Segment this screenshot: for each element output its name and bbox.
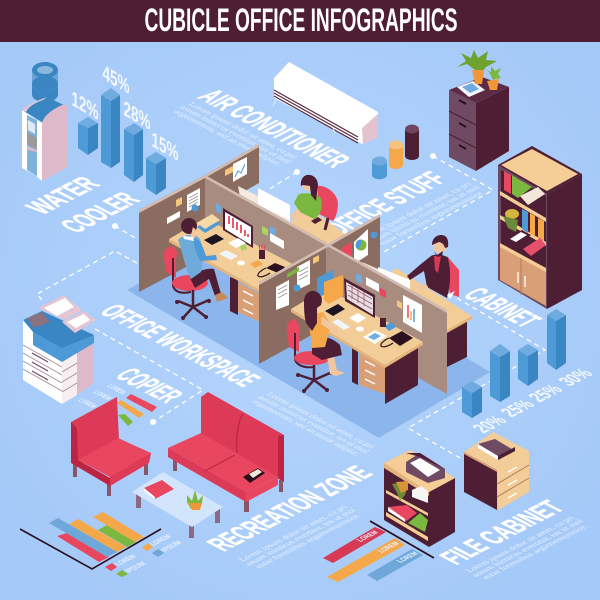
- chart: water cooler bars: [72, 61, 179, 195]
- cubicle: lower-right desk: [291, 270, 423, 404]
- person: woman in orange at lower-right desk: [287, 291, 345, 393]
- chart: water cooler bars: 28%: [124, 97, 151, 135]
- sticker: line chart on back partition: [225, 157, 247, 182]
- sticker notes on left partition: [167, 188, 200, 224]
- chart: copier mini bars: [76, 383, 157, 426]
- label: recreation zone: assum inimicus evertitur, ius ut mol: [242, 507, 359, 567]
- chart: water cooler bars: 45%: [103, 61, 130, 99]
- label: recreation zone: RECREATION ZONE: [200, 462, 380, 555]
- sticker: bar chart: [397, 295, 422, 333]
- woman in green: [294, 193, 322, 219]
- header band: [0, 0, 600, 42]
- monitor: lower-left: [223, 208, 253, 248]
- binders: [317, 270, 333, 296]
- cubicle: left side partition: [139, 175, 205, 292]
- icon: drawer cabinet with plants: [449, 50, 509, 171]
- label: file cabinet: assum inimicus evertitur, ius ut mol: [469, 518, 586, 578]
- chart: water cooler bars: 12%: [72, 87, 99, 125]
- label: office stuff: assum inimicus evertitur, ius ut mol: [366, 184, 483, 244]
- label: office stuff: [316, 168, 490, 248]
- chart: horizontal isometric bars: IPSUM: [159, 539, 185, 553]
- label: recreation zone: Lorem ipsum dolor sit amet, cu pri: [236, 503, 350, 563]
- chart: ribbon bars: LOREM: [355, 529, 381, 543]
- label: office workspace: OFFICE WORKSPACE: [92, 301, 267, 391]
- chart: copier mini bars: LOREM: [91, 389, 114, 401]
- label: copier: COPIER: [108, 365, 190, 407]
- icon: shelf with printer: [384, 450, 455, 547]
- icon: sofa: [168, 392, 284, 512]
- label: water cooler: COOLER: [54, 188, 147, 237]
- chart: ribbon bars: LOREM: [376, 540, 402, 554]
- chart: horizontal isometric bars: IPSUM: [123, 560, 149, 574]
- icon: copier: [23, 295, 96, 404]
- chart: ribbon bars: LOREM: [395, 550, 421, 564]
- plants: [457, 50, 501, 90]
- label: office workspace: Lorem ipsum dolor sit amet, cu pri: [264, 391, 379, 450]
- chair: lower-left: [164, 246, 211, 320]
- label: air conditioner: argumentum, sed an mutat adipisc.: [172, 108, 286, 167]
- chart: cabinet bars: 25%: [496, 397, 540, 420]
- chart: cabinet bars: 25%: [524, 382, 568, 405]
- label: office workspace: assum inimicus evertitur, ius ut mol: [256, 394, 373, 454]
- cubicle: long centre partition: [139, 144, 447, 394]
- cubicle: lower-left desk: [169, 208, 300, 322]
- chart: horizontal isometric bars: LOREM: [113, 553, 139, 567]
- icon: armchair: [71, 397, 151, 496]
- chart: horizontal isometric bars: LOREM: [148, 533, 174, 547]
- monitor: lower-right: [344, 278, 375, 318]
- telephone: [381, 331, 413, 347]
- label: water cooler: [19, 173, 147, 237]
- cubicle: right-hand far partition: [326, 214, 380, 327]
- label: file cabinet: Lorem ipsum dolor sit amet, cu pri: [463, 514, 577, 574]
- label: file cabinet: estae forensibus argumentumnior.: [479, 523, 590, 580]
- label: water cooler: WATER: [19, 173, 108, 218]
- cubicle: back partition: [205, 144, 259, 214]
- icon: bookcase: [498, 146, 582, 309]
- chart: copier mini bars: LOREM: [105, 383, 128, 395]
- cupboard doors: [500, 245, 546, 306]
- chair: upper-left: [317, 186, 338, 221]
- chart: horizontal isometric bars: [20, 512, 185, 577]
- label: air conditioner: Lorem ipsum dolor sit amet, cu pri: [186, 101, 301, 160]
- label: air conditioner: [170, 86, 357, 172]
- man in suit: [407, 255, 450, 298]
- notes on partition: [216, 203, 386, 298]
- icon: air conditioner: [273, 62, 378, 144]
- chair: man: [446, 256, 459, 297]
- label: office stuff: Lorem ipsum dolor sit amet, cu pri: [360, 180, 474, 240]
- sticker: pie chart: [338, 229, 378, 264]
- icon: water cooler: [22, 62, 68, 181]
- dashed connectors: [37, 153, 545, 458]
- cubicle: upper-left desk with woman: [238, 175, 346, 247]
- telephone: [258, 263, 285, 277]
- shelves: [500, 191, 546, 222]
- chart: water cooler bars: 15%: [152, 128, 179, 166]
- label: recreation zone: estae forensibus argumentumnior.: [252, 512, 363, 569]
- label: file cabinet: [433, 497, 593, 582]
- chart: cabinet bars: [462, 309, 598, 436]
- person: man in blue at lower-left desk: [164, 218, 228, 320]
- icon: file cabinet: [464, 432, 529, 510]
- label: air conditioner: assum inimicus evertitur, ius ut mol: [178, 104, 295, 164]
- workspace floor: [127, 225, 490, 438]
- chart: copier mini bars: LOREM: [76, 397, 99, 409]
- chart: cabinet bars: 20%: [468, 413, 512, 436]
- cubicle: upper-right desk with man: [362, 235, 472, 367]
- chart: ribbon bars: [323, 521, 434, 582]
- plant on table: [187, 490, 203, 510]
- label: office stuff: OFFICE STUFF: [316, 168, 454, 239]
- chair: lower-right: [287, 319, 333, 393]
- label: cabinet: CABINET: [456, 284, 548, 332]
- binders and books: [503, 171, 546, 256]
- icon: glass coffee table: [132, 472, 223, 538]
- label: air conditioner: AIR CONDITIONER: [190, 86, 357, 172]
- label: office workspace: argumentum, sed an mutat adipisc.: [250, 398, 364, 457]
- label: recreation zone: [200, 462, 380, 571]
- books: [197, 218, 220, 233]
- cubicle: lower partition: [259, 245, 326, 364]
- printer: [406, 453, 445, 483]
- label: office stuff: estae forensibus argumentumnior.: [376, 189, 487, 246]
- icon: office stuff cylinders: [372, 124, 419, 179]
